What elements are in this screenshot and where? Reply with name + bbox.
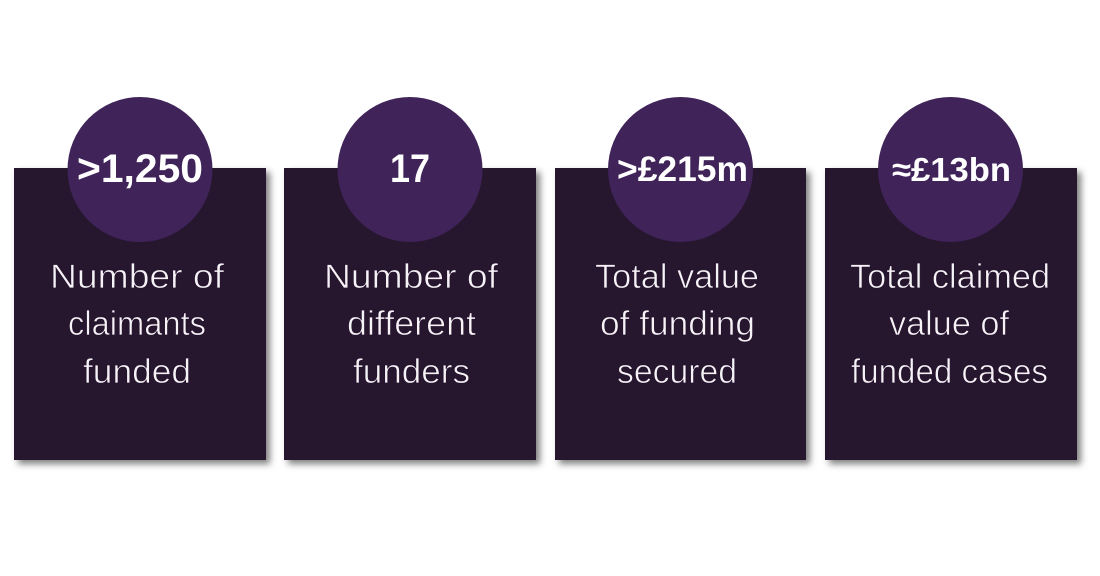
label: Number of claimants funded: [50, 258, 225, 391]
card background: [825, 168, 1077, 460]
label: Number of different funders: different: [347, 305, 477, 343]
stat: >£215m: >£215m: [617, 150, 748, 189]
panel: total value of funding: [555, 97, 806, 460]
panel: different funders: [284, 97, 536, 460]
panel: total claimed value: [825, 97, 1077, 460]
label: Total claimed value of funded cases: Total claimed: [850, 258, 1050, 296]
circle badge: [68, 97, 212, 242]
stat: ≈£13bn: ≈£13bn: [892, 151, 1011, 188]
circle badge: [338, 97, 482, 242]
panel: claimants funded: [14, 97, 266, 460]
label: Number of claimants funded: Number of: [50, 258, 225, 296]
stat: >1,250: >1,250: [77, 147, 203, 191]
circle badge: [608, 97, 753, 242]
label: Total claimed value of funded cases: [850, 258, 1050, 391]
label: Total value of funding secured: [595, 258, 759, 391]
card background: [284, 168, 536, 460]
label: Number of different funders: funders: [353, 353, 470, 391]
stat: 17: 17: [390, 147, 430, 191]
label: Number of claimants funded: claimants: [68, 305, 206, 343]
label: Total value of funding secured: Total value: [595, 258, 759, 296]
circle badge: [878, 97, 1023, 242]
card background: [555, 168, 806, 460]
card background: [14, 168, 266, 460]
label: Number of different funders: Number of: [324, 258, 499, 296]
label: Number of claimants funded: funded: [83, 353, 191, 391]
label: Total claimed value of funded cases: value of: [889, 305, 1010, 343]
label: Number of different funders: [324, 258, 499, 391]
label: Total value of funding secured: secured: [617, 353, 737, 391]
label: Total claimed value of funded cases: funded cases: [851, 353, 1048, 391]
label: Total value of funding secured: of funding: [600, 305, 755, 343]
